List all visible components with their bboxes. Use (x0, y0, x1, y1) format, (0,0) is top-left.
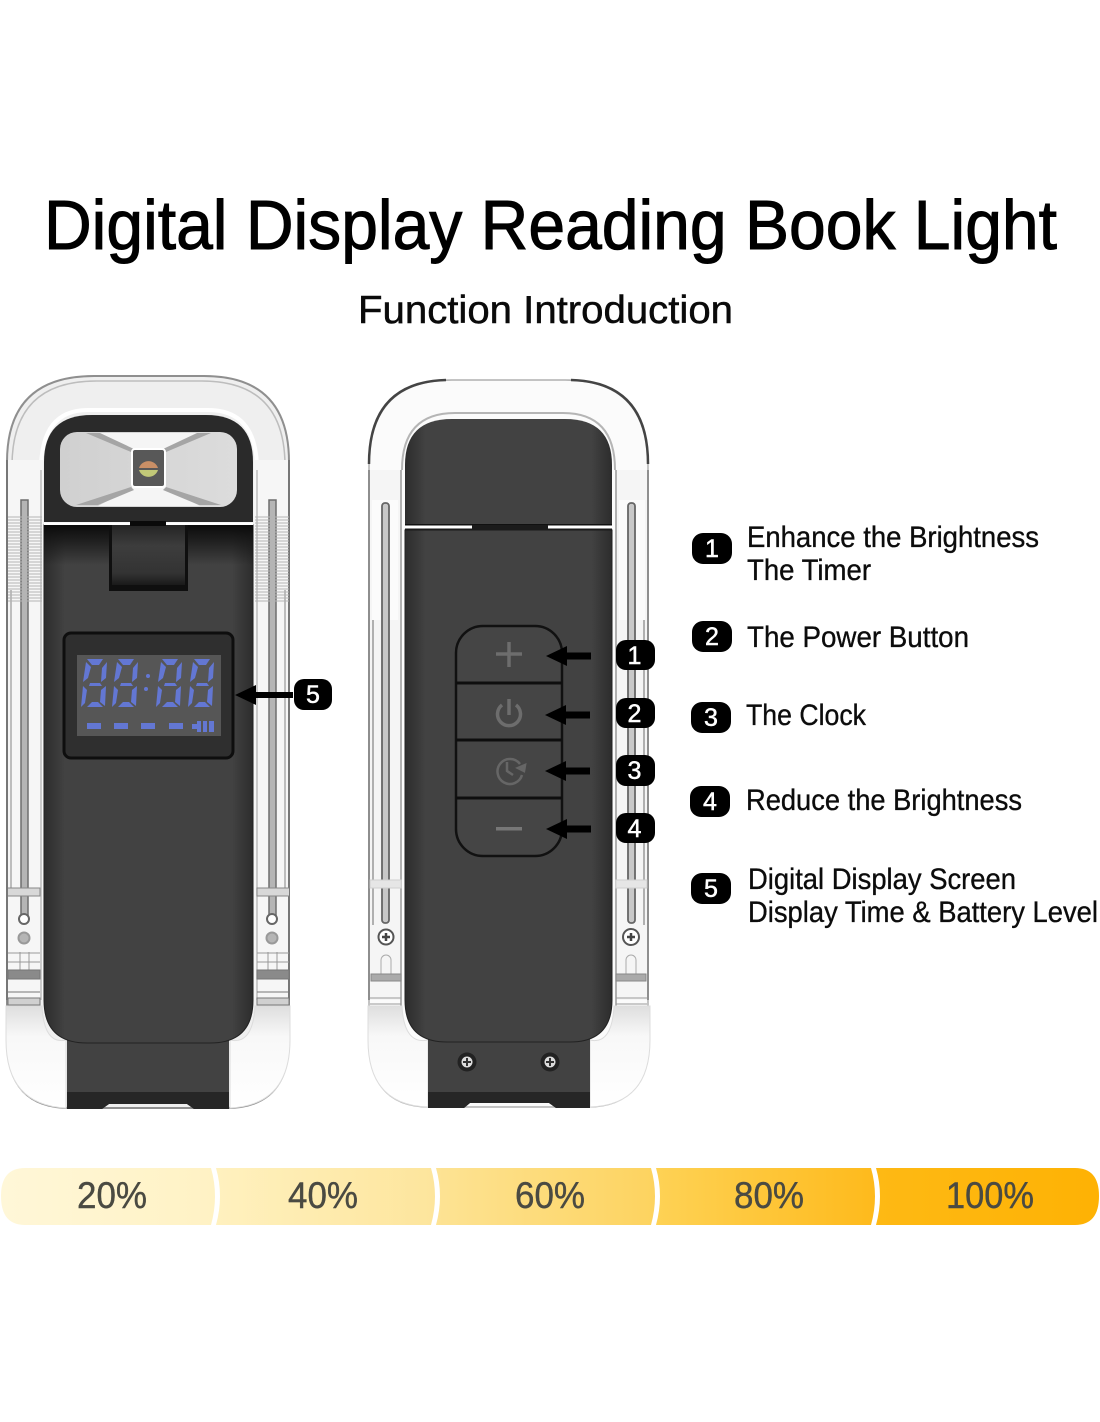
subtitle: Function Introduction (358, 289, 733, 332)
badge 3 on device: 3 (628, 757, 641, 785)
display panel (64, 633, 233, 758)
legend item 1: 1 (705, 535, 719, 563)
icon: minus (496, 827, 522, 830)
button panel (456, 626, 562, 856)
segment 20%: 20% (77, 1175, 147, 1216)
icon: clock (497, 759, 525, 784)
left device: front view with display (6, 376, 332, 1109)
right rail details (255, 500, 289, 1005)
arrow 4 (546, 819, 591, 839)
icon: plus (496, 642, 522, 667)
segment 100% (876, 1168, 1099, 1225)
tail clip (67, 1030, 229, 1109)
badge 2 on device (616, 698, 655, 728)
transparent outer frame (369, 380, 648, 1107)
segment 80%: 80% (734, 1175, 804, 1216)
legend item 2: The Power Button (747, 621, 969, 654)
legend item 1: Enhance the Brightness (747, 521, 1039, 554)
head (405, 419, 612, 524)
legend item 1 (692, 521, 1039, 587)
right device: rear view with buttons (368, 380, 655, 1108)
body (44, 525, 253, 1043)
white head seam (44, 522, 253, 525)
LED (132, 449, 165, 487)
segment 40%: 40% (288, 1175, 358, 1216)
legend item 1: The Timer (747, 554, 871, 587)
arrow 2 (545, 705, 590, 725)
title: Digital Display Reading Book Light (44, 186, 1057, 264)
reflector (60, 432, 237, 507)
legend item 4: Reduce the Brightness (746, 784, 1022, 817)
digits 88:88 (81, 659, 214, 732)
lamp head (44, 415, 253, 522)
legend item 5: Digital Display Screen (748, 863, 1016, 896)
legend item 3: The Clock (746, 699, 867, 732)
body (405, 530, 612, 1042)
badge 1 on device (616, 640, 655, 670)
transparent outer frame (7, 376, 289, 1108)
brightness bar (1, 1168, 1099, 1225)
legend item 2: 2 (705, 623, 719, 651)
legend item 4: 4 (703, 788, 717, 816)
rails (370, 503, 647, 1004)
white bottom corners (368, 1006, 650, 1107)
badge 1 on device: 1 (628, 642, 641, 670)
segment 60% (436, 1168, 655, 1225)
legend item 5 (691, 863, 1098, 929)
badge 2 on device: 2 (628, 700, 641, 728)
badge 3 on device (616, 755, 655, 786)
white bottom corners (6, 1006, 290, 1108)
segment 40% (216, 1168, 435, 1225)
legend item 5: 5 (704, 875, 718, 903)
segment 60%: 60% (515, 1175, 585, 1216)
arrow 1 (546, 646, 591, 666)
tail clip with screws (428, 1030, 590, 1108)
legend item 3 (691, 699, 867, 733)
left rail details (8, 500, 42, 1005)
icon: power (498, 699, 521, 726)
badge 5 on device (294, 679, 332, 710)
legend item 3: 3 (704, 704, 718, 732)
segment 20% (1, 1168, 215, 1225)
seam (405, 524, 612, 530)
rail screws (378, 929, 639, 945)
segment 100%: 100% (946, 1175, 1034, 1216)
segment 80% (656, 1168, 875, 1225)
arrow 3 (545, 761, 590, 781)
hinge tab (109, 525, 188, 591)
badge 5 on device: 5 (306, 681, 320, 709)
badge 4 on device (616, 813, 655, 843)
badge 4 on device: 4 (628, 815, 642, 843)
arrow to display (235, 685, 293, 705)
